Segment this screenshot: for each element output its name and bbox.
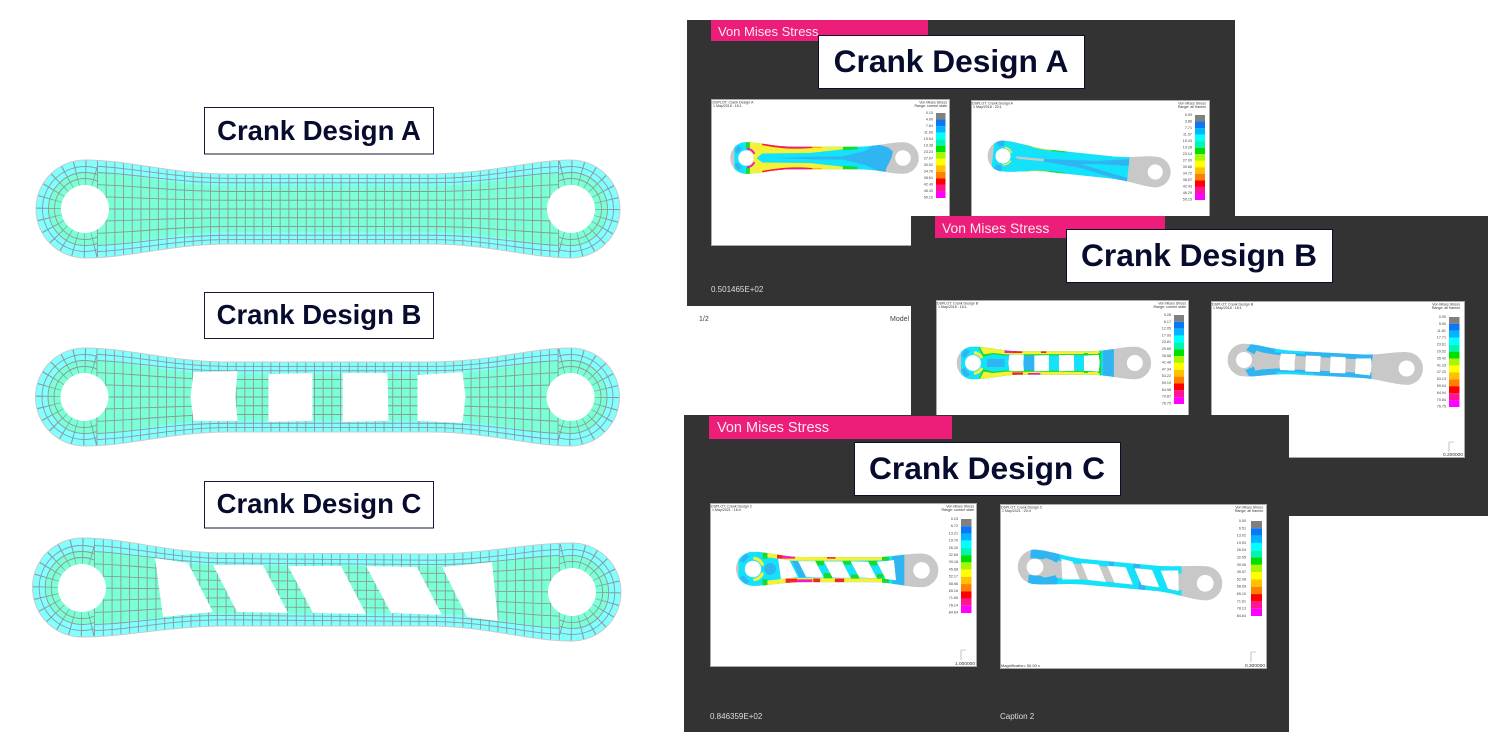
color legend B current: 53.22 [1162,374,1171,378]
color legend A all frames: 30.86 [1183,165,1192,169]
plot: C current state [710,504,976,667]
color legend A current: 38.61 [924,176,933,180]
color legend B all frames: 0.00 [1439,315,1446,319]
color legend B all frames: 70.84 [1437,398,1446,402]
color legend A current: 50.15 [924,196,933,200]
plot: B current state [936,300,1189,415]
color legend A current: 0.15 [926,111,933,115]
axis triad C2 [1251,652,1256,662]
frame time C1: 1.000000 [955,661,975,667]
mesh crank C [32,538,622,642]
color legend A current: 11.69 [924,130,933,134]
color legend B all frames: 47.23 [1437,370,1446,374]
color legend B current: 12.05 [1162,327,1171,331]
title: Crank Design A left: Crank Design A [217,115,421,146]
color legend B current [1162,313,1184,405]
plot: B all frames: 1 May/2018 : 16:1 [1213,306,1242,310]
contour crank B current [956,346,1151,380]
color legend A current: 4.00 [926,118,933,122]
contour crank A current [730,142,919,174]
color legend C all frames: 39.06 [1237,563,1246,567]
panel: stress results design C [684,415,1289,732]
color legend A all frames: 27.00 [1183,158,1192,162]
plot: A current state [712,100,950,246]
title: Crank Design C right: Crank Design C [869,450,1105,486]
color legend A current: 34.76 [924,170,933,174]
title: Crank Design A left [204,108,434,154]
color legend C current: 45.68 [949,567,958,571]
color legend C all frames: 52.08 [1237,577,1246,581]
plot: A current state: DSPLOT: Crank Design A [712,100,754,104]
plot: A all frames: DSPLOT: Crank Design A [972,102,1014,106]
color legend A all frames: 3.86 [1185,120,1192,124]
color legend C all frames: 71.61 [1237,599,1246,603]
color legend B current: 6.17 [1164,320,1171,324]
color legend B all frames: 23.61 [1437,343,1446,347]
color legend A current: 30.92 [924,163,933,167]
color legend B all frames: 53.13 [1437,377,1446,381]
page footer fragment: Model ( [890,316,914,323]
color legend A all frames: 42.43 [1183,184,1192,188]
color legend C all frames: 13.02 [1237,534,1246,538]
plot: A all frames [971,100,1210,216]
mesh crank B [35,348,620,446]
color legend A all frames [1183,113,1205,202]
plot: B all frames [1212,302,1464,458]
color legend A current: 46.30 [924,189,933,193]
color legend B all frames [1437,315,1460,409]
color legend B all frames: 41.33 [1437,363,1446,367]
plot: B all frames: Von Mises Stress [1432,302,1460,306]
plot: B current state: 1 May/2018 : 16:1 [938,305,967,309]
color legend B all frames: 59.04 [1437,384,1446,388]
color legend A all frames: 34.72 [1183,172,1192,176]
color legend B current: 29.69 [1162,347,1171,351]
color legend B current: 23.81 [1162,340,1171,344]
contour crank A all frames [988,140,1171,188]
color legend C current: 32.69 [949,553,958,557]
plot: B current state: Von Mises Stress [1158,302,1186,306]
color legend C all frames: 78.13 [1237,607,1246,611]
tab: Von Mises Stress B: Von Mises Stress [942,220,1049,236]
color legend C all frames: 26.04 [1237,548,1246,552]
axis triad B [1449,442,1454,452]
color legend C current: 26.20 [949,546,958,550]
mesh crank A [36,160,620,258]
color legend A all frames: 19.28 [1183,146,1192,150]
caption 2: Caption 2 [1000,712,1035,721]
color legend B all frames: 17.71 [1437,336,1446,340]
panel: stress results design A [687,20,1235,306]
color legend C all frames: 0.00 [1239,519,1246,523]
color legend A current [924,111,946,200]
color legend A all frames: 50.15 [1183,198,1192,202]
color legend A current: 7.84 [926,124,933,128]
title: Crank Design B right: Crank Design B [1081,237,1317,273]
page footer fragment [699,316,914,323]
axis triad C1 [961,650,966,660]
color legend B all frames: 29.52 [1437,350,1446,354]
title: Crank Design A right: Crank Design A [834,43,1069,79]
color legend B current: 0.28 [1164,313,1171,317]
plot: C all frames: Range: all frames [1235,509,1263,513]
plot: B current state: Range: current state [1153,305,1186,309]
readout: A maximum: 0.501465E+02 [711,285,764,294]
color legend B all frames: 76.75 [1437,405,1446,409]
color legend C current: 0.23 [951,517,958,521]
tab: Von Mises Stress A [711,20,928,41]
contour crank B all frames [1228,344,1423,385]
color legend A current: 19.38 [924,144,933,148]
plot: C all frames: 1 May/2021 : 20:4 [1002,509,1031,513]
title: Crank Design B left [204,292,434,338]
title: Crank Design C right [854,442,1120,496]
color legend C all frames: 6.51 [1239,526,1246,530]
plot: B all frames: Range: all frames [1432,306,1460,310]
color legend C current: 6.72 [951,524,958,528]
color legend A current: 42.46 [924,182,933,186]
color legend B current: 59.10 [1162,381,1171,385]
page footer fragment: 1/2 [699,316,709,323]
color legend A all frames: 38.57 [1183,178,1192,182]
color legend C current: 58.66 [949,582,958,586]
color legend A all frames: 15.43 [1183,139,1192,143]
tab: Von Mises Stress A: Von Mises Stress [718,24,819,39]
color legend B current: 70.87 [1162,395,1171,399]
color legend C current: 65.16 [949,589,958,593]
color legend B current: 35.58 [1162,354,1171,358]
color legend C current: 39.18 [949,560,958,564]
plot: A all frames: Von Mises Stress [1178,102,1206,106]
color legend C current: 19.70 [949,539,958,543]
plot: C current state: Von Mises Stress [946,504,974,508]
plot: A current state: 1 May/2018 : 16:1 [713,104,742,108]
color legend B all frames: 11.81 [1437,329,1446,333]
color legend C all frames: 32.55 [1237,556,1246,560]
title: Crank Design C left: Crank Design C [217,488,422,519]
title: Crank Design B left: Crank Design B [217,299,421,330]
color legend B current: 17.93 [1162,333,1171,337]
contour crank C current [736,552,938,588]
color legend C all frames: 45.57 [1237,570,1246,574]
color legend C current: 78.14 [949,603,958,607]
color legend A all frames: 0.00 [1185,113,1192,117]
magnification note: Magnification: 50.00 x [1001,663,1040,668]
color legend A all frames: 7.71 [1185,126,1192,130]
panel: stress results design B [911,216,1488,516]
title: Crank Design C left [204,482,434,528]
color legend A all frames: 11.57 [1183,132,1192,136]
color legend C current: 13.21 [949,531,958,535]
tab: Von Mises Stress C [709,416,952,439]
contour crank C all frames [1018,550,1222,600]
color legend C all frames: 19.53 [1237,541,1246,545]
color legend A all frames: 23.14 [1183,152,1192,156]
plot: B all frames: DSPLOT: Crank Design B [1212,302,1254,306]
title: Crank Design B right [1066,230,1332,282]
color legend B all frames: 64.94 [1437,391,1446,395]
plot: C current state: 1 May/2021 : 16:4 [712,508,741,512]
color legend B all frames: 35.42 [1437,356,1446,360]
color legend B current: 47.34 [1162,367,1171,371]
plot: C current state: DSPLOT: Crank Design C [711,504,753,508]
plot: C all frames: DSPLOT: Crank Design C [1001,506,1043,510]
color legend B current: 76.75 [1162,401,1171,405]
plot: C current state: Range: current state [941,508,974,512]
plot: C all frames: Von Mises Stress [1235,506,1263,510]
color legend B all frames: 5.90 [1439,322,1446,326]
plot: C all frames [1000,504,1266,669]
color legend C current [949,517,972,615]
color legend C all frames: 65.10 [1237,592,1246,596]
color legend C current: 84.64 [949,611,958,615]
frame time C2: 0.300000 [1245,663,1265,669]
color legend A current: 15.54 [924,137,933,141]
readout: C maximum: 0.846359E+02 [710,712,763,721]
plot: A all frames: Range: all frames [1178,105,1206,109]
frame time B: 0.200000 [1443,452,1463,458]
color legend A all frames: 46.29 [1183,191,1192,195]
title: Crank Design A right [818,36,1084,88]
color legend B current: 64.98 [1162,388,1171,392]
plot: A current state: Von Mises Stress [919,100,947,104]
color legend C current: 71.65 [949,596,958,600]
tab: Von Mises Stress B [935,216,1165,238]
color legend C all frames [1237,519,1262,618]
plot: A current state: Range: current state [914,104,947,108]
color legend C all frames: 84.64 [1237,614,1246,618]
plot: A all frames: 1 May/2018 : 20:1 [973,105,1002,109]
color legend A current: 23.23 [924,150,933,154]
color legend C all frames: 58.59 [1237,585,1246,589]
color legend B current: 41.46 [1162,361,1171,365]
tab: Von Mises Stress C: Von Mises Stress [717,420,829,436]
plot: B current state: DSPLOT: Crank Design B [937,302,979,306]
color legend C current: 52.17 [949,575,958,579]
color legend A current: 27.07 [924,156,933,160]
